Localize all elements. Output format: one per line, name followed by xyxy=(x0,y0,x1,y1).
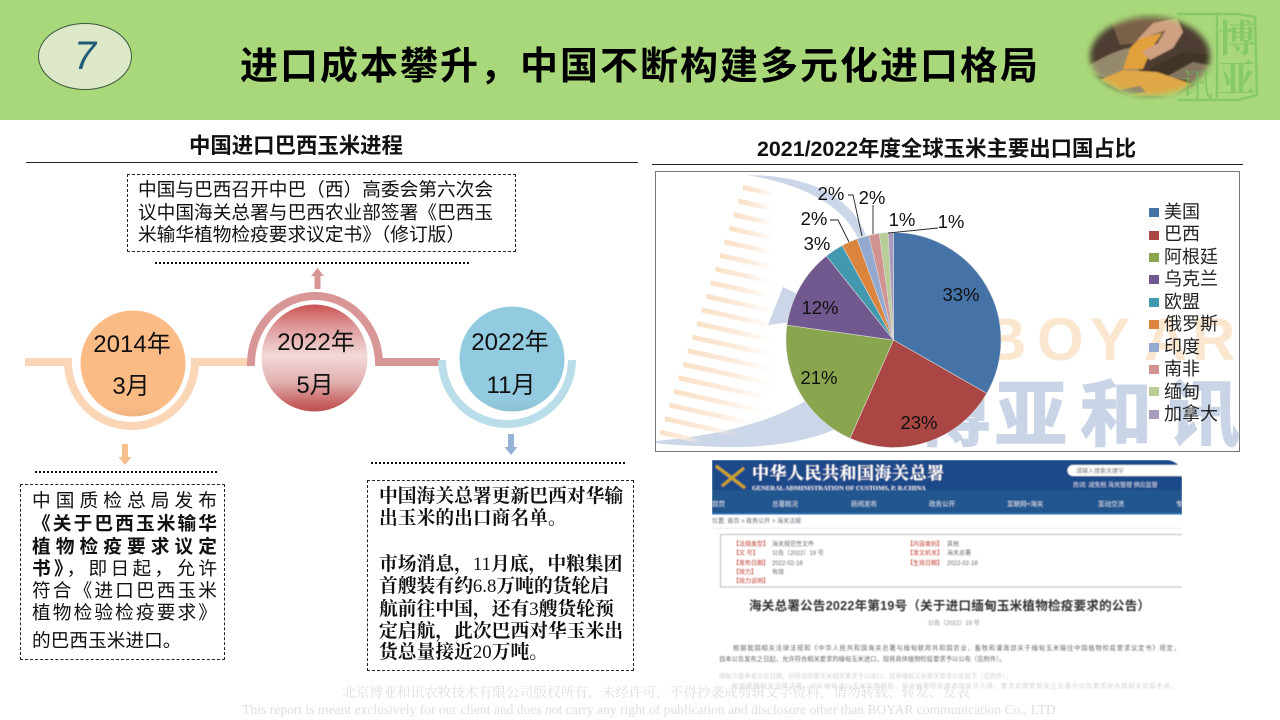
site banner: 互动交流 xyxy=(1098,499,1124,508)
callout: 2014年3月: 书》，即日起，允许 xyxy=(32,558,217,579)
seal: 亚 xyxy=(1218,48,1256,103)
callout: 2022年11月: 首艘装有约6.8万吨的货轮启 xyxy=(379,576,609,597)
callout: 2014年3月: 中国质检总局发布 xyxy=(32,490,217,511)
pie labels: 33% xyxy=(942,284,980,305)
arrow up xyxy=(311,268,324,289)
callout: 2022年5月: 米输华植物检疫要求议定书》（修订版） xyxy=(138,224,465,245)
notice body xyxy=(719,643,1180,690)
title: 进口成本攀升，中国不断构建多元化进口格局 xyxy=(240,46,1040,88)
dotted rule right xyxy=(371,462,625,464)
site banner: 首页 xyxy=(712,499,726,508)
heading rule left xyxy=(26,162,638,163)
node: 2022年11月: 11月 xyxy=(487,372,535,399)
callout: 2022年11月: 出玉米的出口商名单。 xyxy=(379,508,567,529)
blue connector xyxy=(442,360,572,424)
notice body: 自本公告发布之日起，允许符合相关要求的缅甸玉米进口，现将具体植物检疫要求予以公布（见附件）。 xyxy=(719,654,1006,663)
document meta box: 【法规类型】 xyxy=(733,540,769,548)
legend: 美国 xyxy=(1164,202,1200,222)
callout: 2014年3月: 植物检疫要求议定 xyxy=(32,536,217,557)
callout: 2014年3月 xyxy=(20,484,225,660)
arrow blue down xyxy=(504,434,518,455)
callout: 2014年3月: 的巴西玉米进口。 xyxy=(32,630,182,651)
site banner xyxy=(712,459,1183,514)
breadcrumb: 位置: 首页 > 政务公开 > 海关法规 xyxy=(712,517,801,525)
document meta box: 其他 xyxy=(947,540,959,548)
callout: 2022年11月 xyxy=(367,480,634,671)
node: 2014年3月 xyxy=(79,309,187,418)
callout: 2022年5月 xyxy=(127,174,516,252)
callout: 2022年11月: 航前往中国，还有3艘货轮预 xyxy=(379,599,614,620)
document meta box: 【效力说明】 xyxy=(733,577,769,585)
pie labels: 1% xyxy=(889,209,915,230)
document meta box: 有效 xyxy=(772,568,784,576)
watermark xyxy=(656,175,1240,456)
site banner: 热词: 减免税 海关管理 供应监管 xyxy=(1073,481,1158,489)
site banner: GENERAL ADMINISTRATION OF CUSTOMS, P. R.CHINA xyxy=(752,485,926,492)
pie slices xyxy=(786,232,1001,447)
dotted rule left xyxy=(35,471,217,473)
callout: 2022年5月: 中国与巴西召开中巴（西）高委会第六次会 xyxy=(138,179,493,200)
timeline xyxy=(25,268,576,465)
orange connector xyxy=(25,362,249,426)
legend: 欧盟 xyxy=(1164,292,1200,312)
document meta box: 2022-02-18 xyxy=(947,561,978,567)
arrow orange down xyxy=(118,444,132,465)
document meta box: 【发文机关】 xyxy=(907,549,943,557)
legend: 印度 xyxy=(1164,337,1200,357)
watermark: B xyxy=(983,306,1026,373)
heading: pie chart: 2021/2022年度全球玉米主要出口国占比 xyxy=(757,137,1136,161)
document meta box: 公告〔2022〕19 号 xyxy=(772,549,824,557)
document meta box: 海关规范性文件 xyxy=(772,540,814,548)
callout: 2022年11月: 中国海关总署更新巴西对华输 xyxy=(379,486,623,507)
site banner: 新闻发布 xyxy=(851,499,878,508)
watermark: A xyxy=(1144,306,1187,373)
notice body: 缅甸方面来者公告日期，对符合所需玉米相关要求予以进口，现将缅甸玉米相关要求公告如下（见附件）。 xyxy=(719,671,1012,680)
site banner: 政务公开 xyxy=(929,499,956,508)
legend: 俄罗斯 xyxy=(1164,314,1218,334)
pie labels: 23% xyxy=(900,412,938,433)
leader lines xyxy=(830,195,938,242)
document meta box xyxy=(720,534,1182,587)
legend: 缅甸 xyxy=(1164,382,1200,402)
section number badge: 7 xyxy=(74,34,96,78)
seal xyxy=(1177,8,1257,106)
notice title: 海关总署公告2022年第19号（关于进口缅甸玉米植物检疫要求的公告） xyxy=(749,598,1150,613)
node: 2022年11月: 2022年 xyxy=(471,329,549,356)
site banner: 互联网+海关 xyxy=(1007,499,1044,508)
callout: 2014年3月: 《关于巴西玉米输华 xyxy=(32,513,217,534)
heading rule right xyxy=(652,164,1243,165)
document meta box: 【内容类别】 xyxy=(907,540,943,548)
document meta box: 【效力】 xyxy=(733,568,757,576)
pie labels: 12% xyxy=(801,297,839,318)
red connector xyxy=(251,296,440,366)
callout: 2022年11月: 定启航，此次巴西对华玉米出 xyxy=(379,621,623,642)
node: 2022年11月 xyxy=(458,305,566,413)
pie labels xyxy=(800,183,980,433)
pie labels: 21% xyxy=(800,367,838,388)
pie labels: 1% xyxy=(938,211,964,232)
legend xyxy=(1149,202,1218,424)
watermark: R xyxy=(1192,306,1235,373)
pie labels: 3% xyxy=(804,233,830,254)
heading: timeline: 中国进口巴西玉米进程 xyxy=(189,134,403,158)
legend: 乌克兰 xyxy=(1164,269,1218,289)
section number badge xyxy=(38,23,132,90)
footer: copyright Chinese: 北京博亚和讯农牧技术有限公司版权所有，未经许可，不得抄袭或剪辑文字资料，请勿转载、转发、发表 xyxy=(342,685,970,700)
node: 2014年3月: 3月 xyxy=(112,373,150,400)
header band xyxy=(0,0,1280,120)
node: 2022年5月 xyxy=(260,303,369,413)
notice body: 依据我国相关法律法规，对从缅甸进口玉米实施检疫，符合植物检疫要求的准许入境，要求如需要相关企业遵守公告要求并办理相关检疫手续。 xyxy=(732,681,1177,690)
node: 2014年3月: 2014年 xyxy=(93,331,171,358)
notice body: 根据我国相关法律法规和《中华人民共和国海关总署与缅甸联邦共和国农业、畜牧和灌溉部关于缅甸玉米输往中国植物检疫要求议定书》规定， xyxy=(733,643,1180,652)
site banner: 总署概况 xyxy=(772,499,798,508)
footer: copyright English: This report is meant exclusively for our client and does not carry any right of publication and disclosure other than BOYAR communication Co., LTD xyxy=(242,702,1056,717)
seal: 博 xyxy=(1218,8,1256,63)
document meta box: 【发布日期】 xyxy=(733,559,769,567)
panel: customs website screenshot xyxy=(712,460,1182,690)
callout: 2022年11月: 市场消息，11月底，中粮集团 xyxy=(379,554,622,575)
callout: 2022年5月: 议中国海关总署与巴西农业部签署《巴西玉 xyxy=(138,202,493,223)
seal: 讯 xyxy=(1181,60,1213,106)
document meta box: 【生效日期】 xyxy=(907,559,943,567)
callout: 2014年3月: 植物检验检疫要求》 xyxy=(32,602,217,623)
pie labels: 2% xyxy=(801,208,827,229)
callout: 2022年11月: 货总量接近20万吨。 xyxy=(379,642,548,663)
panel: pie chart xyxy=(655,171,1240,452)
legend: 南非 xyxy=(1164,359,1200,379)
document meta box: 【文 号】 xyxy=(733,549,759,557)
legend: 巴西 xyxy=(1164,224,1200,244)
watermark: O xyxy=(1037,306,1084,373)
icon: grain photo and seal xyxy=(1086,8,1258,106)
watermark: Y xyxy=(1090,306,1130,373)
callout: 2014年3月: 符合《进口巴西玉米 xyxy=(32,580,217,601)
document meta box: 2022-02-18 xyxy=(772,561,803,567)
legend: 阿根廷 xyxy=(1164,247,1218,267)
panel: customs website screenshot: 公告〔2022〕19 号 xyxy=(928,619,980,627)
pie labels: 2% xyxy=(818,183,844,204)
pie labels: 2% xyxy=(859,187,885,208)
site banner: 请输入搜索关键字 xyxy=(1076,467,1124,475)
legend: 加拿大 xyxy=(1164,403,1218,424)
node: 2022年5月: 5月 xyxy=(296,372,334,399)
dotted rule top xyxy=(155,262,469,264)
node: 2022年5月: 2022年 xyxy=(277,329,355,356)
document meta box: 海关总署 xyxy=(947,549,971,557)
